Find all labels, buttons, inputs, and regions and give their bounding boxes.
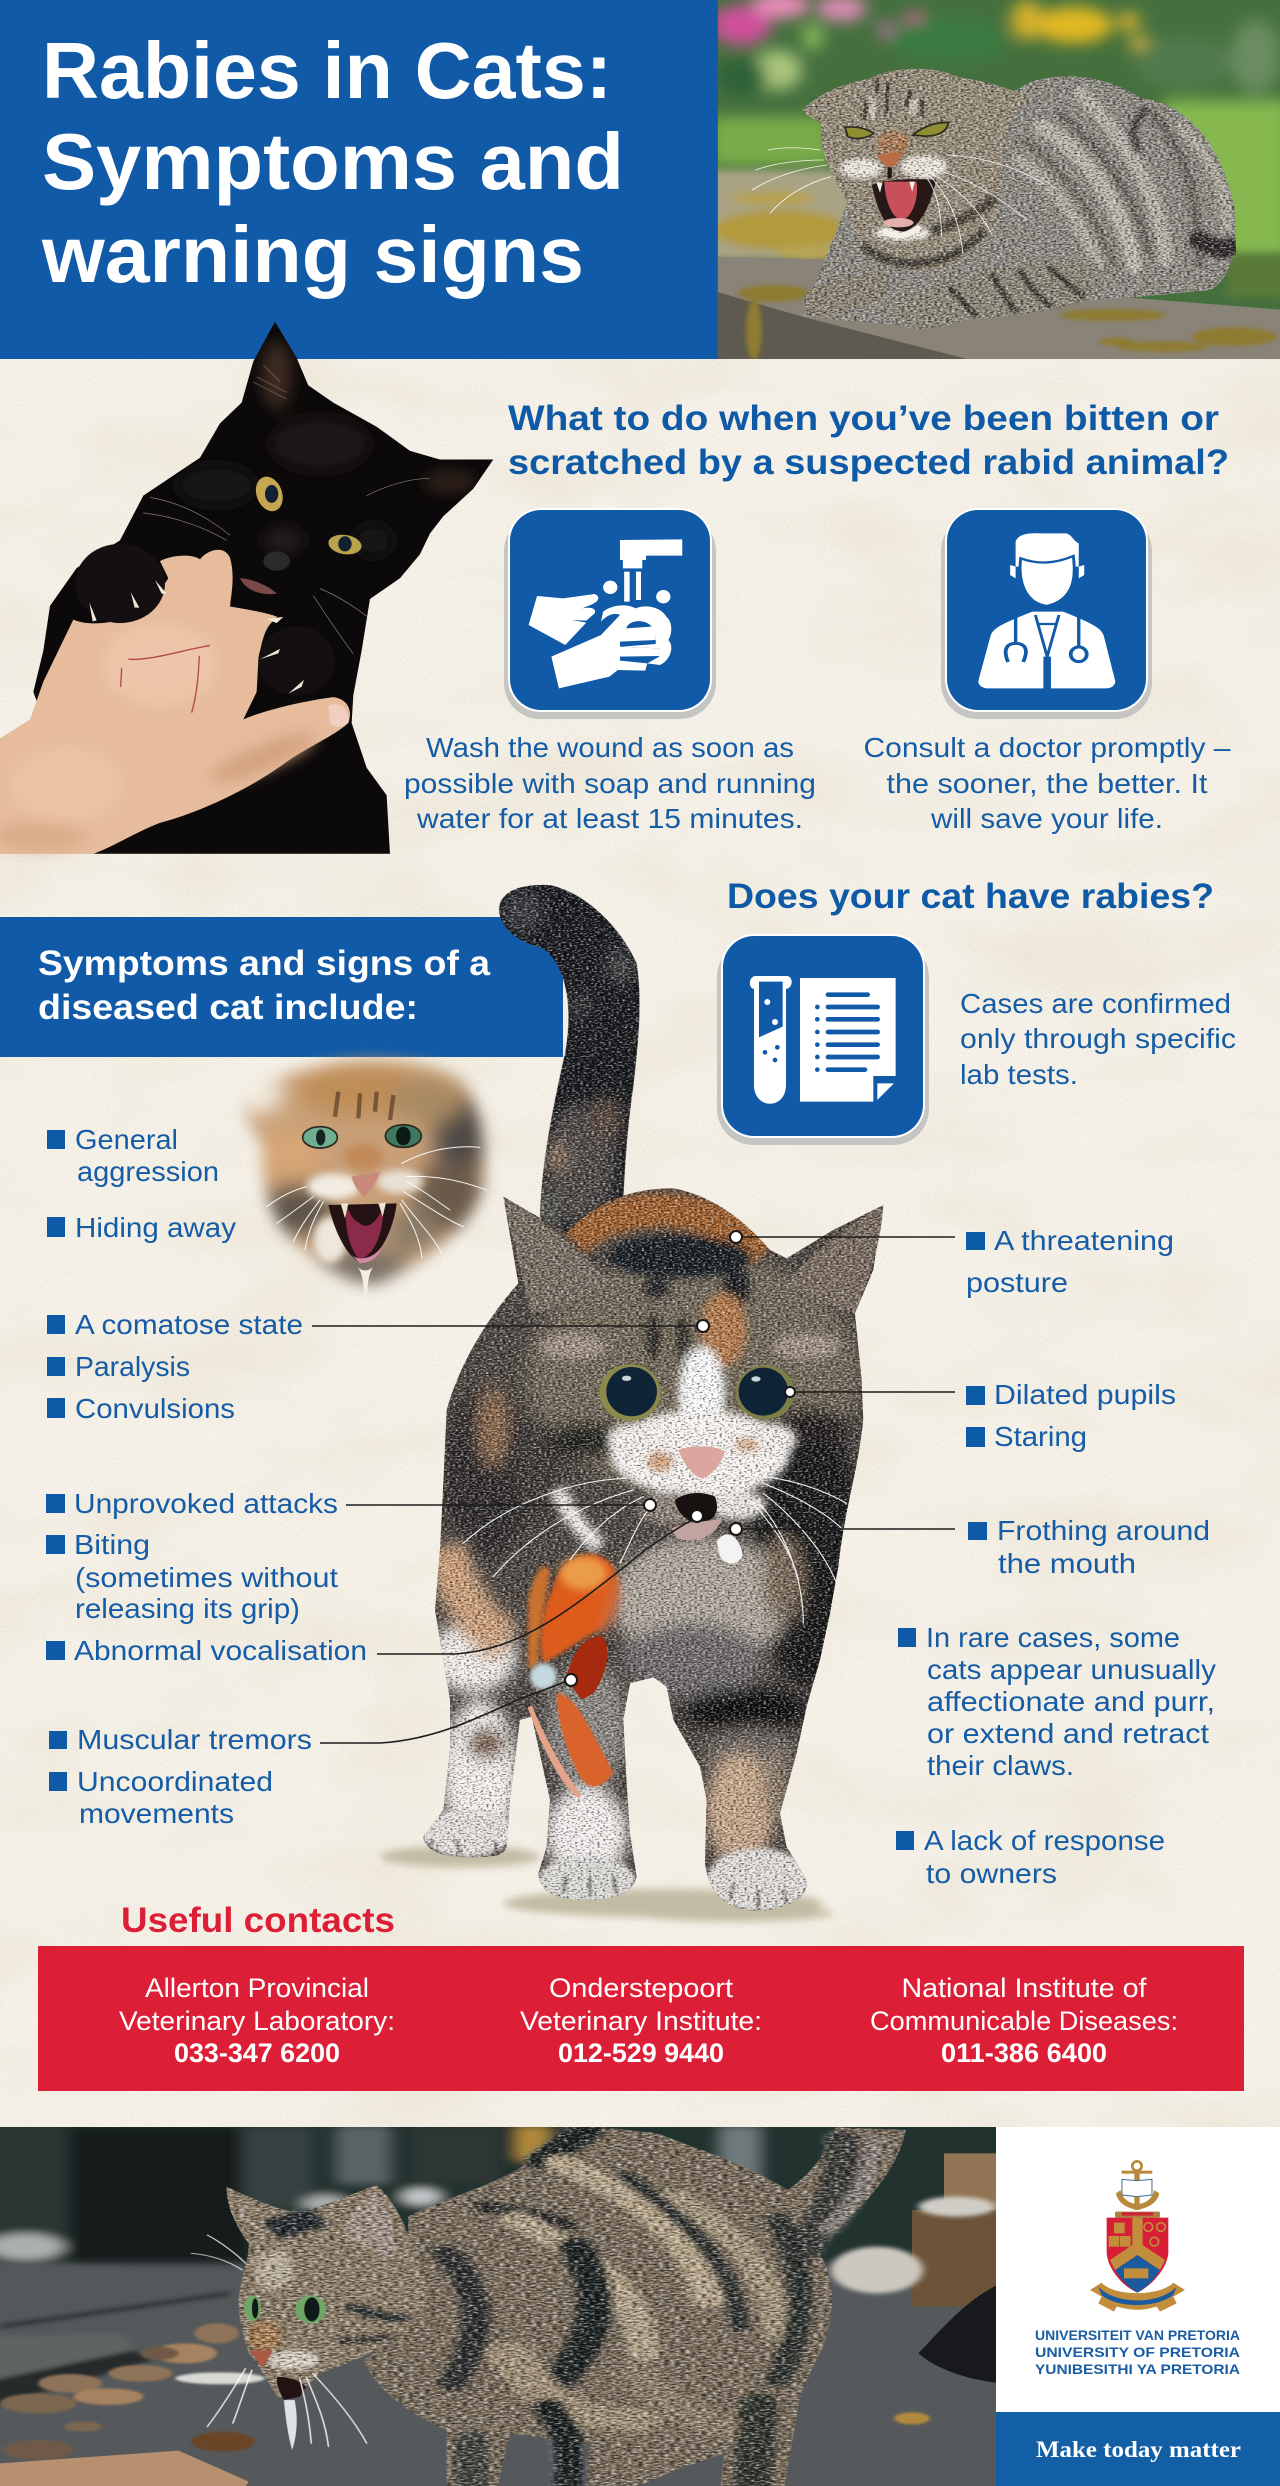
symptom: paralysis: Paralysis bbox=[75, 1351, 190, 1382]
contact: Onderstepoort bbox=[520, 1973, 762, 2068]
title: Rabies in Cats: bbox=[42, 26, 612, 115]
title: warning signs bbox=[41, 210, 584, 299]
illustration: aggressive ginger cat face with drool bbox=[236, 1049, 496, 1295]
symptom: frothing around the mouth: Frothing around bbox=[997, 1515, 1210, 1546]
icon: washing hands bbox=[504, 508, 716, 719]
nose and mouth bbox=[672, 1446, 743, 1563]
symptom list: right column bbox=[896, 1225, 1216, 1889]
symptom: unprovoked attacks: Unprovoked attacks bbox=[74, 1488, 338, 1519]
text: wash the wound: water for at least 15 minutes. bbox=[416, 803, 803, 834]
illustration: calico cat with anatomy overlay bbox=[380, 880, 900, 1922]
toe lines bbox=[428, 1840, 787, 1908]
symptom: dilated pupils: Dilated pupils bbox=[994, 1379, 1176, 1410]
callout dot: abnormal vocalisation bbox=[691, 1510, 703, 1522]
callout dot: a comatose state bbox=[697, 1320, 709, 1332]
symptom: rare cases bbox=[898, 1622, 1216, 1781]
symptom: abnormal vocalisation: Abnormal vocalisation bbox=[74, 1635, 367, 1666]
symptom: staring: Staring bbox=[994, 1421, 1087, 1452]
black cat body bbox=[0, 320, 500, 857]
symptom: uncoordinated movements bbox=[49, 1766, 273, 1829]
logo wordmark: YUNIBESITHI YA PRETORIA bbox=[1035, 2361, 1240, 2377]
text: consult a doctor: the sooner, the better. It bbox=[886, 768, 1208, 799]
symptom: uncoordinated movements: movements bbox=[79, 1798, 234, 1829]
callout line: unprovoked attacks bbox=[346, 1504, 644, 1506]
banner heading bbox=[38, 944, 491, 1027]
text: wash the wound bbox=[404, 732, 816, 834]
contact: Onderstepoort: 012-529 9440 bbox=[558, 2038, 724, 2068]
panel: symptoms banner bbox=[0, 917, 563, 1057]
title bbox=[41, 26, 624, 299]
whiskers bbox=[463, 1477, 847, 1623]
text: cases are confirmed bbox=[960, 988, 1236, 1090]
symptom: convulsions: Convulsions bbox=[75, 1393, 235, 1424]
fallen leaves bbox=[0, 2323, 930, 2460]
text: consult a doctor: Consult a doctor promptly – bbox=[864, 732, 1231, 763]
symptom: uncoordinated movements: Uncoordinated bbox=[77, 1766, 273, 1797]
callout line: abnormal vocalisation bbox=[377, 1519, 693, 1654]
symptom: muscular tremors: Muscular tremors bbox=[77, 1724, 312, 1755]
callout line: frothing bbox=[742, 1528, 955, 1530]
contact: NICD: Communicable Diseases: bbox=[870, 2006, 1178, 2036]
symptom: biting bbox=[46, 1529, 338, 1624]
text: consult a doctor: will save your life. bbox=[930, 803, 1163, 834]
anchor and book bbox=[1115, 2161, 1160, 2218]
text: cases are confirmed: lab tests. bbox=[960, 1059, 1078, 1090]
panel: University of Pretoria logo bbox=[996, 2127, 1280, 2412]
contact: Allerton: Veterinary Laboratory: bbox=[119, 2006, 395, 2036]
contact: Onderstepoort: Veterinary Institute: bbox=[520, 2006, 762, 2036]
symptom: rare cases: or extend and retract bbox=[927, 1718, 1209, 1749]
whiskers of street cat bbox=[191, 2235, 367, 2447]
callout dot: unprovoked attacks bbox=[644, 1499, 656, 1511]
eyes, nose and mouth of tabby bbox=[845, 123, 949, 235]
symptom: threatening posture: posture bbox=[966, 1267, 1068, 1298]
left ear and right ear bbox=[503, 1197, 883, 1313]
callout dot: a threatening posture bbox=[730, 1231, 742, 1243]
face details of street cat bbox=[244, 2295, 326, 2450]
hand bbox=[0, 550, 350, 854]
symptom: general aggression: aggression bbox=[77, 1156, 219, 1187]
eyes of black cat bbox=[240, 472, 363, 594]
crest bbox=[1090, 2161, 1185, 2312]
symptom: lack of response bbox=[896, 1825, 1165, 1889]
heading: what to do: What to do when you’ve been bitten or bbox=[508, 399, 1219, 438]
ginger cat whiskers bbox=[267, 1147, 487, 1258]
heading: what to do bbox=[508, 399, 1229, 482]
tabby cat bbox=[802, 69, 1236, 329]
ginger cat face colouring bbox=[307, 1143, 423, 1263]
illustration: black cat biting a hand bbox=[0, 320, 500, 857]
contact: Allerton: 033-347 6200 bbox=[174, 2038, 340, 2068]
symptom: biting: releasing its grip) bbox=[75, 1593, 300, 1624]
symptom: threatening posture bbox=[966, 1225, 1174, 1298]
symptom: a comatose state: A comatose state bbox=[75, 1309, 303, 1340]
logo wordmark: UNIVERSITY OF PRETORIA bbox=[1035, 2344, 1240, 2360]
heading: does your cat have rabies: Does your cat have rabies? bbox=[727, 877, 1214, 916]
whiskers of black cat bbox=[143, 478, 430, 654]
contact: Allerton: Allerton Provincial bbox=[145, 1973, 369, 2003]
symptom: frothing around the mouth: the mouth bbox=[998, 1548, 1136, 1579]
callout line: a comatose state bbox=[312, 1325, 697, 1327]
panel: slogan: Make today matter bbox=[1036, 2437, 1241, 2463]
whiskers of tabby bbox=[752, 148, 1043, 253]
text: cases are confirmed: only through specific bbox=[960, 1023, 1236, 1054]
lower paw with claws bbox=[258, 617, 335, 695]
symptom: lack of response: A lack of response bbox=[924, 1825, 1165, 1856]
callout line: muscular tremors bbox=[320, 1682, 565, 1743]
symptom: rare cases: their claws. bbox=[927, 1750, 1074, 1781]
title: Symptoms and bbox=[42, 117, 624, 206]
symptom: threatening posture: A threatening bbox=[994, 1225, 1174, 1256]
text: cases are confirmed: Cases are confirmed bbox=[960, 988, 1231, 1019]
stone slab bbox=[716, 257, 1280, 362]
callout line: dilated pupils bbox=[795, 1391, 955, 1393]
muscle anatomy overlay bbox=[528, 1555, 622, 1797]
contact: NICD: 011-386 6400 bbox=[941, 2038, 1107, 2068]
symptom: general aggression: General bbox=[75, 1124, 178, 1155]
callouts: left side bbox=[312, 1320, 709, 1743]
panel: header title block bbox=[0, 0, 718, 359]
sidewalk and kerb bbox=[0, 2263, 242, 2407]
cardboard on ground bbox=[0, 2451, 249, 2486]
heading: useful contacts: Useful contacts bbox=[121, 1901, 395, 1940]
panel: contacts bbox=[38, 1946, 1244, 2091]
symptom list: left column bbox=[46, 1124, 367, 1829]
contact: NICD: National Institute of bbox=[902, 1973, 1147, 2003]
ground shadows bbox=[380, 1846, 833, 1922]
banner heading: diseased cat include: bbox=[38, 988, 418, 1027]
text: consult a doctor bbox=[864, 732, 1231, 834]
callout line: a threatening posture bbox=[742, 1236, 955, 1238]
upper paw with claws bbox=[75, 544, 167, 623]
motto ribbon bbox=[1090, 2283, 1185, 2312]
callout dot: frothing bbox=[730, 1523, 742, 1535]
symptom: frothing around the mouth bbox=[968, 1515, 1210, 1579]
symptom: lack of response: to owners bbox=[926, 1858, 1057, 1889]
icon: lab test tube and report bbox=[717, 934, 929, 1145]
ear highlights bbox=[253, 365, 287, 399]
panel: slogan bbox=[996, 2412, 1280, 2486]
symptom: rare cases: affectionate and purr, bbox=[927, 1686, 1215, 1717]
contact: NICD bbox=[870, 1973, 1178, 2068]
tabby cat body bbox=[226, 2127, 906, 2486]
symptom: rare cases: In rare cases, some bbox=[926, 1622, 1180, 1653]
callouts: right side bbox=[730, 1231, 955, 1535]
photo: sick tabby cat drooling on a street bbox=[0, 2120, 1014, 2486]
front paws bbox=[422, 1809, 810, 1912]
ginger cat features bbox=[303, 1092, 421, 1307]
icon: doctor bbox=[941, 508, 1152, 719]
eyes bbox=[599, 1364, 794, 1421]
symptom: hiding away: Hiding away bbox=[75, 1212, 236, 1243]
body and head bbox=[417, 1180, 900, 1920]
callout dot: dilated pupils bbox=[785, 1387, 795, 1397]
shield bbox=[1107, 2218, 1168, 2293]
logo wordmark: UNIVERSITEIT VAN PRETORIA bbox=[1035, 2327, 1240, 2343]
heading: what to do: scratched by a suspected rabid animal? bbox=[508, 443, 1229, 482]
symptom: biting: Biting bbox=[74, 1529, 150, 1560]
banner heading: Symptoms and signs of a bbox=[38, 944, 491, 983]
contact: Onderstepoort: Onderstepoort bbox=[549, 1973, 734, 2003]
logo wordmark bbox=[1035, 2327, 1240, 2377]
trash and box right bbox=[831, 2153, 1001, 2383]
callout dot: muscular tremors bbox=[565, 1674, 577, 1686]
contact: Allerton bbox=[119, 1973, 395, 2068]
symptom: rare cases: cats appear unusually bbox=[927, 1654, 1216, 1685]
text: wash the wound: possible with soap and running bbox=[404, 768, 816, 799]
tail bbox=[498, 884, 640, 1234]
text: wash the wound: Wash the wound as soon as bbox=[426, 732, 794, 763]
symptom: general aggression bbox=[47, 1124, 219, 1187]
photo: snarling tabby in a garden bbox=[709, 0, 1280, 362]
symptom: biting: (sometimes without bbox=[75, 1562, 338, 1593]
